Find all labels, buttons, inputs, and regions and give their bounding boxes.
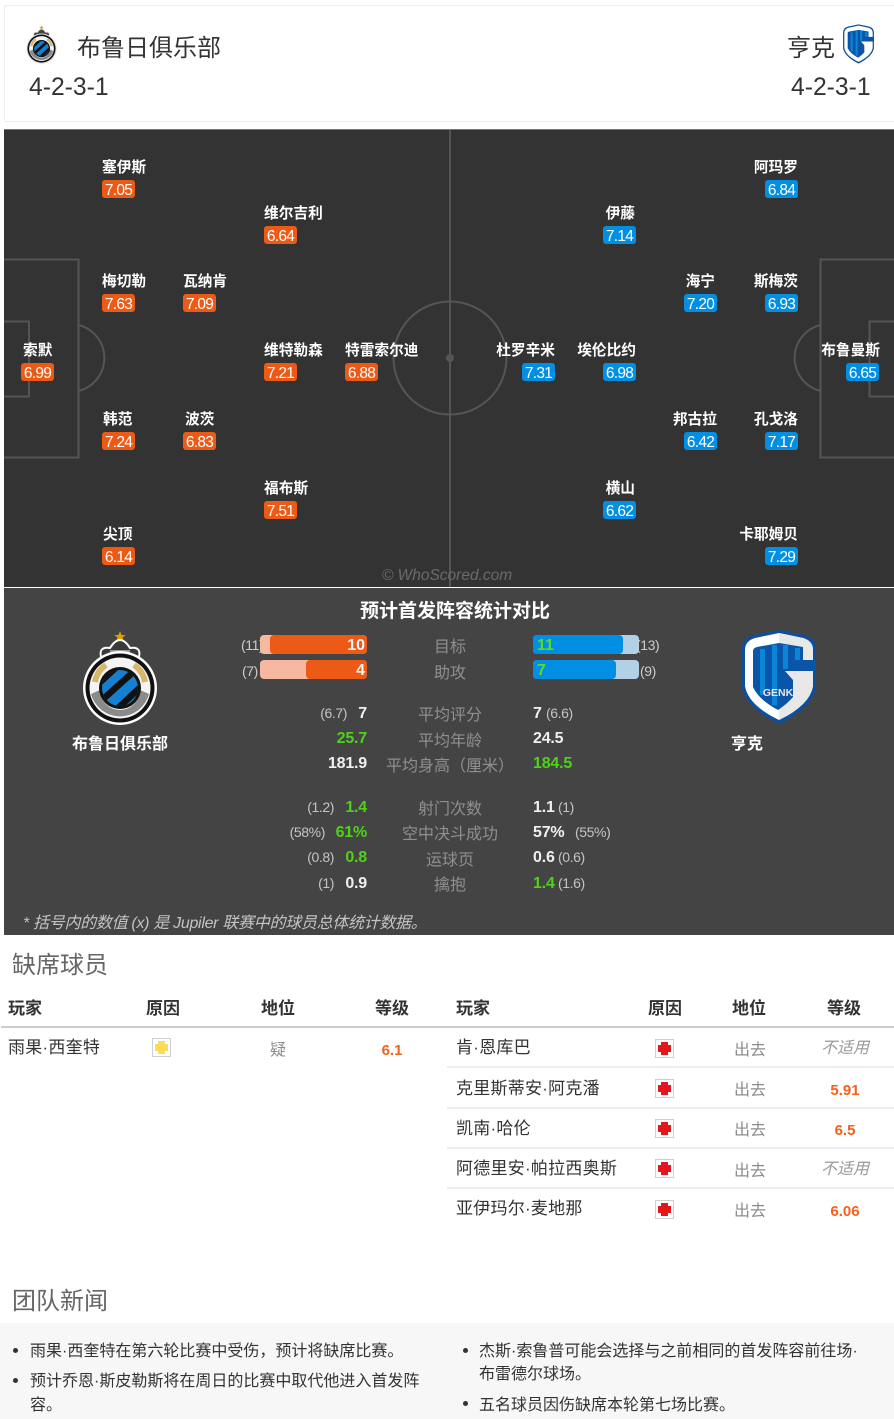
icon: injured	[655, 1079, 674, 1098]
stat row: dribbles	[307, 849, 585, 869]
player: 邦古拉	[673, 411, 717, 450]
stat row: dribbles: (0.6)	[558, 849, 585, 865]
stat row: average rating	[320, 705, 573, 724]
player: 福布斯	[264, 480, 308, 519]
away assists bar: 7	[537, 662, 546, 679]
pitch markings	[4, 130, 894, 587]
row: 亚伊玛尔·麦地那: 亚伊玛尔·麦地那	[456, 1199, 583, 1218]
away news list: 杰斯·索鲁普可能会选择与之前相同的首发阵容前往场·	[479, 1343, 858, 1360]
stat row: average rating: 7	[533, 705, 542, 722]
heading: team news: 团队新闻	[12, 1288, 108, 1315]
player: 伊藤: 伊藤	[606, 206, 635, 222]
player: 塞伊斯: 塞伊斯	[102, 160, 146, 176]
away news list: 五名球员因伤缺席本轮第七场比赛。	[479, 1397, 735, 1414]
player: 布鲁曼斯	[821, 342, 880, 381]
row: 雨果·西奎特: 6.1	[382, 1042, 402, 1059]
panel: lineup statistics comparison	[4, 588, 894, 935]
row: 凯南·哈伦: 凯南·哈伦	[456, 1119, 531, 1138]
player: 杜罗辛米: 杜罗辛米	[496, 343, 555, 359]
player: 卡耶姆贝	[739, 526, 798, 565]
row: 克里斯蒂安·阿克潘	[456, 1079, 860, 1099]
table: away missing players: 等级	[827, 999, 861, 1018]
heading: missing players: 缺席球员	[12, 952, 108, 979]
away assists league value: (9)	[640, 663, 656, 679]
away goals league value: (13)	[636, 637, 659, 653]
stat row: average height: 181.9	[328, 755, 367, 772]
player: 梅切勒: 梅切勒	[102, 274, 146, 290]
row: 肯·恩库巴	[456, 1038, 870, 1059]
player: 瓦纳肯	[183, 273, 227, 312]
away goals bar	[533, 635, 639, 654]
assists label: 助攻	[434, 665, 466, 682]
icon: injured	[655, 1159, 674, 1178]
away goals bar: 11	[537, 637, 554, 654]
table: away missing players: 原因	[648, 999, 682, 1018]
row: 克里斯蒂安·阿克潘: 克里斯蒂安·阿克潘	[456, 1079, 600, 1098]
icon: doubtful	[152, 1038, 171, 1057]
icon: Genk crest small	[843, 24, 874, 64]
row: 克里斯蒂安·阿克潘: 5.91	[830, 1082, 860, 1099]
table: home missing players	[1, 999, 447, 1059]
row: 亚伊玛尔·麦地那: 出去	[734, 1203, 766, 1220]
stat row: shots on target: 1.4	[345, 799, 367, 816]
player: 埃伦比约: 埃伦比约	[577, 343, 636, 359]
column headers: 玩家	[456, 999, 490, 1018]
stat row: tackles: 擒抱	[434, 877, 466, 894]
panel: team news	[0, 1323, 894, 1419]
stat row: average age	[337, 730, 564, 750]
stat: goals	[241, 635, 659, 656]
home goals league value: (11)	[241, 637, 263, 653]
away assists bar	[533, 660, 639, 679]
stat row: aerial duels won: (55%)	[575, 824, 610, 840]
home goals bar	[260, 635, 367, 654]
stat row: shots on target	[307, 799, 574, 818]
player: 斯梅茨	[754, 273, 798, 312]
stat row: aerial duels won: 61%	[336, 824, 367, 841]
player: 福布斯: 福布斯	[264, 481, 308, 497]
player: 横山	[603, 480, 636, 519]
stat row: tackles: (1.6)	[558, 875, 585, 891]
stat: assists	[242, 660, 656, 682]
player: 波茨	[183, 411, 216, 450]
row: 雨果·西奎特: 雨果·西奎特	[8, 1038, 100, 1057]
table: home missing players: 地位	[261, 999, 295, 1018]
player: 邦古拉: 邦古拉	[673, 412, 717, 428]
player: 孔戈洛	[754, 411, 798, 450]
player: 维尔吉利	[264, 205, 323, 244]
table: away missing players	[447, 999, 894, 1220]
player: 韩范	[102, 411, 135, 450]
stat row: aerial duels won: 空中决斗成功	[402, 826, 498, 843]
table: away missing players: 地位	[732, 999, 766, 1018]
player: 埃伦比约	[577, 342, 636, 381]
row: 阿德里安·帕拉西奥斯: 不适用	[821, 1161, 869, 1178]
stat row: average age: 25.7	[337, 730, 367, 747]
table: home missing players: 原因	[146, 999, 180, 1018]
row: 阿德里安·帕拉西奥斯: 阿德里安·帕拉西奥斯	[456, 1159, 617, 1178]
column headers: 玩家	[8, 999, 42, 1018]
icon: Genk crest: GENK	[763, 687, 794, 699]
home team label: 布鲁日俱乐部	[72, 736, 168, 753]
stat row: aerial duels won: 57%	[533, 824, 564, 841]
icon: Genk crest	[742, 630, 816, 724]
icon: injured	[655, 1039, 674, 1058]
row: 雨果·西奎特: 疑	[270, 1042, 286, 1059]
stat row: dribbles: 0.8	[345, 849, 367, 866]
icon: Club Brugge crest	[83, 631, 157, 725]
header: team names and formations	[4, 5, 894, 122]
stat row: aerial duels won	[290, 824, 610, 843]
stat row: dribbles: 0.6	[533, 849, 555, 866]
table: home missing players: 等级	[375, 999, 409, 1018]
row: 亚伊玛尔·麦地那	[447, 1196, 894, 1226]
home news list	[0, 1323, 447, 1419]
player: 布鲁曼斯: 布鲁曼斯	[821, 343, 880, 359]
player: 杜罗辛米	[496, 342, 555, 381]
row: 凯南·哈伦	[456, 1119, 856, 1139]
stat row: shots on target: (1.2)	[307, 799, 334, 815]
row: 凯南·哈伦: 6.5	[835, 1122, 855, 1139]
stat row: tackles: 1.4	[533, 875, 555, 892]
icon: injured	[655, 1200, 674, 1219]
away news list	[447, 1323, 894, 1419]
player: 塞伊斯	[102, 159, 146, 198]
player: 特雷索尔迪	[345, 342, 418, 381]
home assists bar: 4	[356, 662, 365, 679]
stat row: tackles: (1)	[318, 875, 334, 891]
row: 肯·恩库巴: 出去	[734, 1042, 766, 1059]
player: 横山: 横山	[606, 481, 635, 497]
stat row: tackles: 0.9	[345, 875, 367, 892]
icon: Club Brugge crest small	[26, 26, 56, 64]
player: 海宁: 海宁	[686, 274, 715, 290]
home assists league value: (7)	[242, 663, 258, 679]
away news list: 布雷德尔球场。	[479, 1366, 591, 1383]
stat row: average height: 平均身高（厘米）	[386, 758, 514, 775]
away team label: 亨克	[731, 736, 763, 753]
row: 肯·恩库巴: 不适用	[821, 1040, 869, 1057]
stat row: average rating: 7	[358, 705, 367, 722]
stat row: dribbles: 运球页	[426, 852, 474, 869]
row: 阿德里安·帕拉西奥斯	[447, 1156, 894, 1186]
away formation: 4-2-3-1	[791, 74, 871, 101]
goals label: 目标	[434, 639, 466, 656]
panel: pitch with predicted line-ups	[4, 129, 894, 587]
player: 孔戈洛: 孔戈洛	[754, 412, 798, 428]
away team name: 亨克	[787, 35, 835, 62]
player: 波茨: 波茨	[185, 412, 214, 428]
stats title: 预计首发阵容统计对比	[360, 601, 550, 622]
player: 维特勒森: 维特勒森	[264, 343, 323, 359]
player: 尖顶: 尖顶	[103, 527, 132, 543]
row: 肯·恩库巴: 肯·恩库巴	[456, 1038, 531, 1057]
home team name: 布鲁日俱乐部	[77, 35, 221, 62]
stat row: dribbles: (0.8)	[307, 849, 334, 865]
player: 阿玛罗	[754, 160, 798, 198]
home news list: 雨果·西奎特在第六轮比赛中受伤，预计将缺席比赛。	[30, 1343, 403, 1360]
icon: injured	[655, 1119, 674, 1138]
stat row: average height	[328, 755, 572, 775]
home news list: 容。	[30, 1397, 62, 1414]
stat row: shots on target: (1)	[558, 799, 574, 815]
player: 维特勒森	[264, 342, 323, 381]
home news list: 预计乔恩·斯皮勒斯将在周日的比赛中取代他进入首发阵	[30, 1373, 419, 1390]
row: 亚伊玛尔·麦地那: 6.06	[830, 1203, 860, 1220]
player: 索默	[21, 342, 54, 381]
stat row: average age: 24.5	[533, 730, 563, 747]
stat row: shots on target: 射门次数	[418, 801, 482, 818]
player: 伊藤	[603, 205, 636, 244]
player: 海宁	[684, 273, 717, 312]
watermark: © WhoScored.com	[382, 567, 512, 584]
player: 卡耶姆贝: 卡耶姆贝	[739, 527, 798, 543]
home goals bar: 10	[347, 637, 365, 654]
player: 瓦纳肯: 瓦纳肯	[183, 274, 227, 290]
stat row: aerial duels won: (58%)	[290, 824, 325, 840]
home formation: 4-2-3-1	[29, 74, 109, 101]
home assists bar	[260, 660, 367, 679]
player: 韩范: 韩范	[103, 412, 132, 428]
player: 阿玛罗: 阿玛罗	[754, 160, 798, 176]
row: 克里斯蒂安·阿克潘: 出去	[734, 1082, 766, 1099]
player: 斯梅茨: 斯梅茨	[754, 274, 798, 290]
player: 尖顶	[102, 526, 135, 565]
stat row: average rating: (6.6)	[546, 705, 573, 721]
stat row: average age: 平均年龄	[418, 733, 482, 750]
row: 阿德里安·帕拉西奥斯: 出去	[734, 1163, 766, 1180]
player: 索默: 索默	[23, 343, 52, 359]
stat row: average rating: (6.7)	[320, 705, 347, 721]
row: 凯南·哈伦: 出去	[734, 1122, 766, 1139]
player: 梅切勒	[102, 273, 146, 312]
stat row: average rating: 平均评分	[418, 707, 482, 724]
player: 特雷索尔迪: 特雷索尔迪	[345, 343, 418, 359]
stat row: tackles	[318, 875, 585, 894]
footnote: * 括号内的数值 (x) 是 Jupiler 联赛中的球员总体统计数据。	[23, 915, 426, 932]
player: 维尔吉利: 维尔吉利	[264, 206, 323, 222]
row: 雨果·西奎特	[8, 1038, 402, 1059]
stat row: shots on target: 1.1	[533, 799, 555, 816]
stat row: average height: 184.5	[533, 755, 572, 772]
